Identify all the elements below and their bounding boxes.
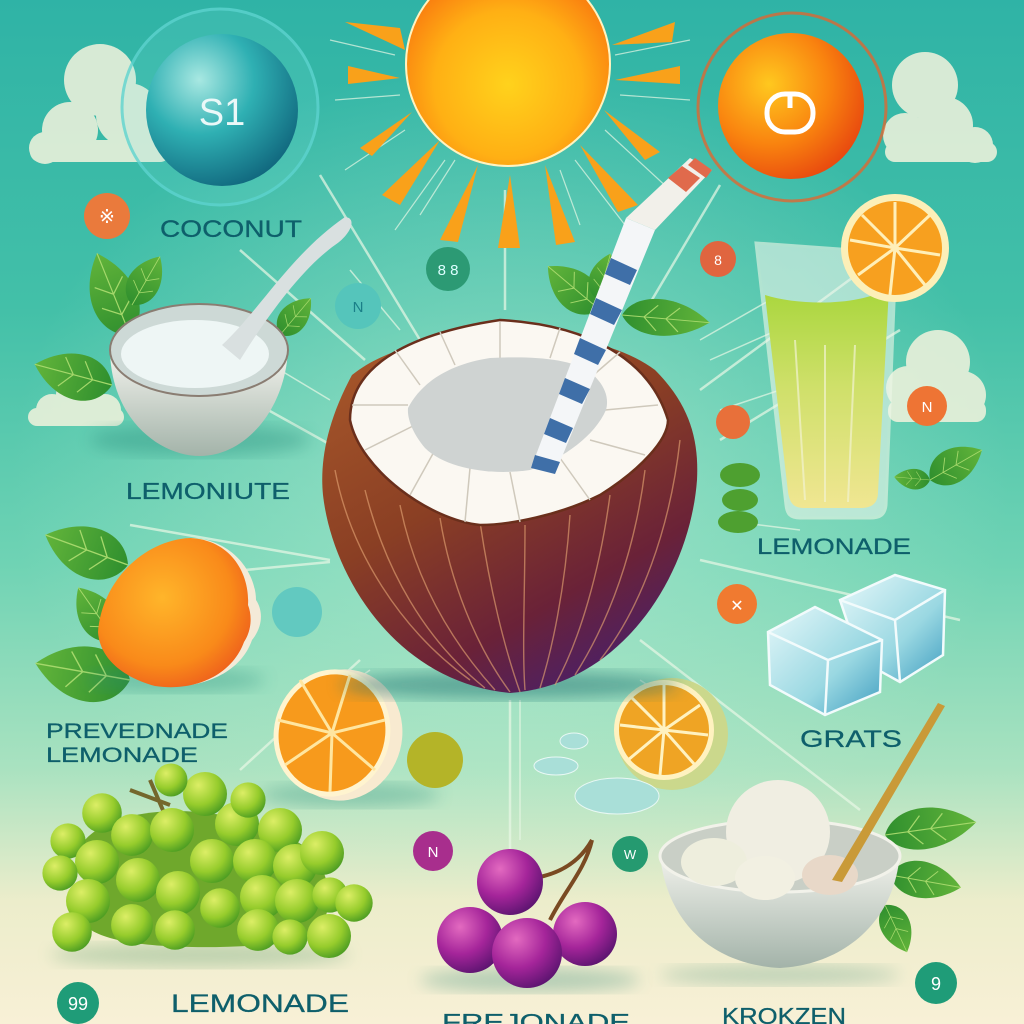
radiating rays [130, 40, 960, 880]
icon: small red badge [700, 241, 736, 277]
illustration: ice cubes [768, 575, 945, 715]
sun [345, 0, 680, 248]
label: lemonade bottom: LEMONADE [171, 990, 349, 1018]
water drops [534, 733, 659, 814]
illustration: green grapes [42, 764, 373, 967]
icon: orange badge right [907, 386, 947, 426]
clouds [28, 44, 997, 426]
icon: small teal badge: N [353, 299, 363, 316]
icon: orange badge [698, 13, 886, 201]
label: prevednade lemonade: LEMONADE [46, 744, 198, 767]
icon: small orange badge [84, 193, 130, 239]
label: prevednade lemonade: PREVEDNADE [46, 720, 228, 743]
illustration: striped straw and mint [531, 158, 712, 474]
label: lemonade right: LEMONADE [757, 534, 911, 559]
icon: orange badge lower [717, 584, 757, 624]
icon: orange badge lower: ✕ [730, 598, 744, 615]
illustration: halved orange [259, 656, 463, 814]
icon: small teal badge [335, 283, 381, 329]
sun rays [345, 22, 680, 248]
icon: small green badge [426, 247, 470, 291]
illustration: lime half [614, 678, 728, 790]
icon: teal badge: S1 [199, 92, 245, 134]
illustration: ice-cream bowl [660, 703, 979, 985]
illustration: coconut [322, 320, 697, 699]
icon: small green badge: 8 8 [438, 262, 458, 279]
icon: orange badge right: N [922, 399, 932, 416]
icon: small orange badge: ※ [99, 207, 115, 228]
icon: green number badge right: 9 [931, 974, 941, 994]
label: grats: GRATS [800, 726, 902, 753]
icon: purple badge [413, 831, 453, 871]
illustration: glass of juice with orange slice [718, 194, 990, 533]
icon: green badge [612, 836, 648, 872]
illustration: lemon with leaves [30, 512, 322, 708]
icon: green badge: W [624, 847, 637, 862]
icon: green number badge left: 99 [68, 994, 88, 1014]
heading: coconut: COCONUT [160, 216, 302, 243]
label: lemoniute: LEMONIUTE [126, 478, 290, 504]
icon: green number badge right [915, 962, 957, 1004]
icon: teal badge [122, 9, 318, 205]
label: prevednade lemonade [46, 720, 228, 767]
icon: purple badge: N [428, 844, 438, 861]
icon: small red badge: 8 [714, 252, 722, 268]
icon: orange dot [716, 405, 750, 439]
illustration: yogurt bowl with leaves and spoon [29, 217, 352, 456]
illustration: purple berries [420, 840, 640, 992]
icon: green number badge left [57, 982, 99, 1024]
